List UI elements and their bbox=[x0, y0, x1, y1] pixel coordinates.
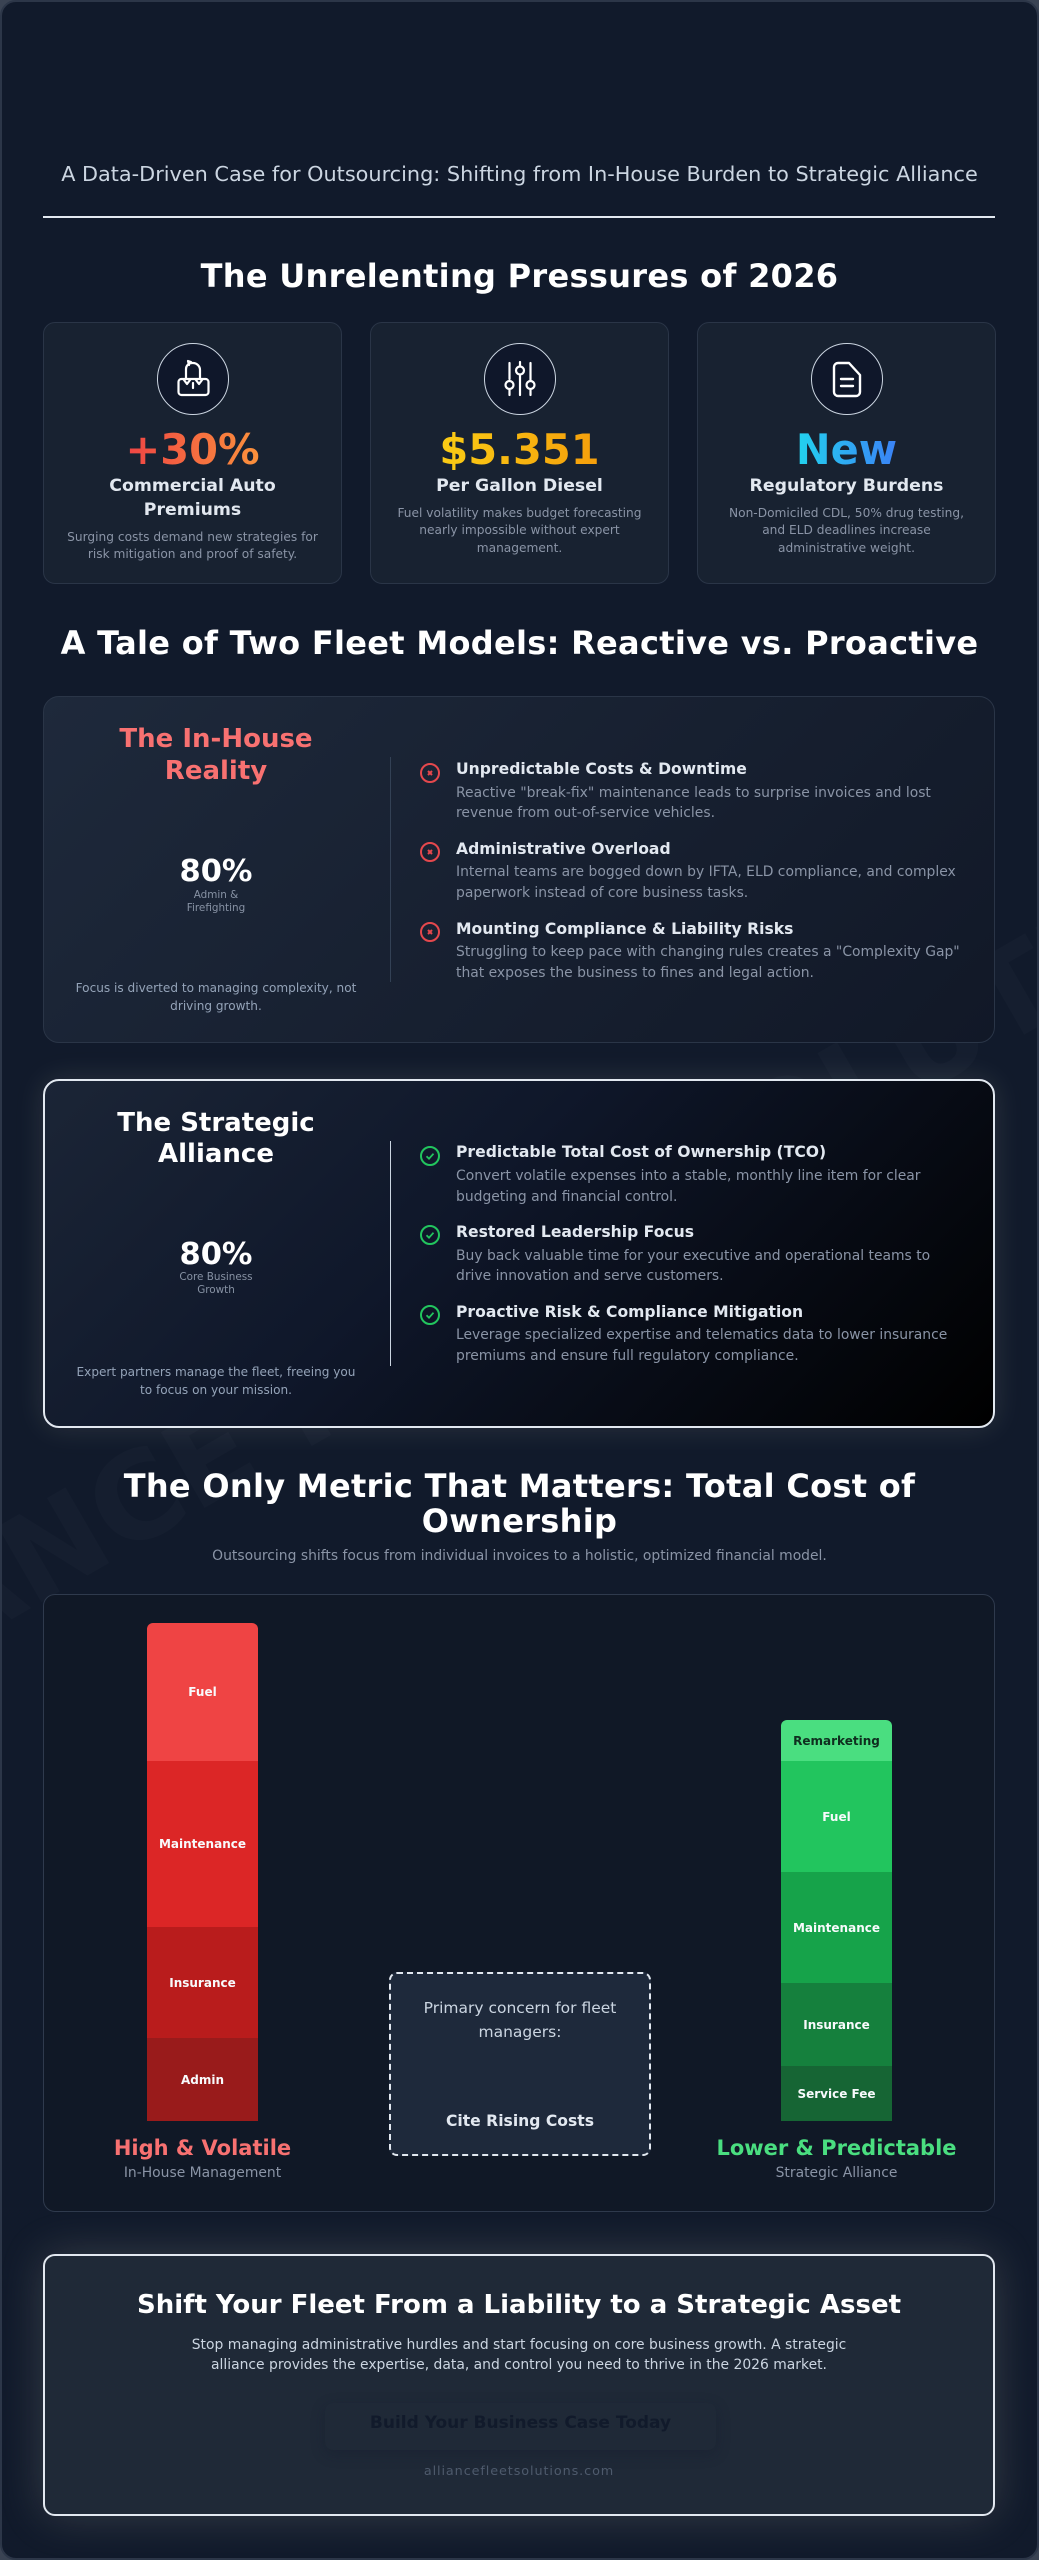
divider bbox=[390, 757, 391, 982]
heading: The Strategic bbox=[117, 1108, 315, 1138]
panel: strategic alliance bbox=[43, 1079, 995, 1428]
description: risk mitigation and proof of safety. bbox=[88, 547, 297, 561]
note: to focus on your mission. bbox=[140, 1382, 292, 1396]
callout text bbox=[424, 1998, 616, 2041]
stat caption: Admin & bbox=[194, 888, 238, 900]
icon: premium bag bbox=[157, 343, 229, 415]
callout text: managers: bbox=[479, 2023, 561, 2041]
callout emphasis: Cite Rising Costs bbox=[446, 2112, 594, 2130]
segment: fuel bbox=[147, 1623, 258, 1761]
bar caption: Strategic Alliance bbox=[776, 2165, 897, 2181]
heading: Reality bbox=[165, 756, 267, 786]
segment: fuel bbox=[781, 1761, 892, 1872]
cta text: Stop managing administrative hurdles and start focusing on core business growth. A strategic bbox=[192, 2337, 846, 2353]
segment: admin bbox=[147, 2038, 258, 2121]
label bbox=[109, 476, 276, 520]
segment: insurance: Insurance bbox=[803, 2018, 870, 2032]
segment: insurance: Insurance bbox=[169, 1976, 236, 1990]
stat caption: Core Business bbox=[179, 1270, 253, 1282]
segment: fuel: Fuel bbox=[188, 1685, 217, 1699]
website: alliancefleetsolutions.com bbox=[424, 2464, 614, 2479]
panel: in-house reality bbox=[43, 696, 995, 1043]
label: Commercial Auto bbox=[109, 476, 276, 496]
segment: service fee bbox=[781, 2066, 892, 2121]
bar label: Lower & Predictable bbox=[716, 2136, 957, 2160]
item text: drive innovation and serve customers. bbox=[456, 1268, 724, 1284]
label: Per Gallon Diesel bbox=[436, 476, 603, 496]
cta button: Build Your Business Case Today bbox=[370, 2413, 671, 2433]
item title: Administrative Overload bbox=[456, 840, 671, 858]
callout: primary concern bbox=[389, 1972, 651, 2156]
item text bbox=[456, 864, 956, 901]
segment: insurance bbox=[781, 1983, 892, 2066]
item text: Internal teams are bogged down by IFTA, ELD compliance, and complex bbox=[456, 864, 956, 880]
panel: diesel price bbox=[370, 322, 669, 584]
panel: regulatory burdens bbox=[697, 322, 996, 584]
segment: remarketing bbox=[781, 1720, 892, 1761]
icon: document bbox=[811, 343, 883, 415]
stat caption bbox=[187, 888, 245, 914]
description: Surging costs demand new strategies for bbox=[67, 530, 318, 544]
segment: admin: Admin bbox=[181, 2072, 224, 2086]
header rule bbox=[43, 216, 995, 218]
description: and ELD deadlines increase bbox=[762, 523, 931, 537]
note bbox=[76, 981, 356, 1012]
note: Focus is diverted to managing complexity, not bbox=[76, 981, 356, 995]
label: Premiums bbox=[144, 500, 241, 520]
description: management. bbox=[477, 541, 562, 555]
item text: Leverage specialized expertise and telematics data to lower insurance bbox=[456, 1327, 947, 1343]
icon: check bbox=[420, 1305, 440, 1325]
heading bbox=[117, 1108, 315, 1168]
segment: service fee: Service Fee bbox=[797, 2086, 876, 2100]
item title: Mounting Compliance & Liability Risks bbox=[456, 920, 793, 938]
stacked bar: alliance bbox=[781, 1720, 892, 2121]
item text bbox=[456, 1248, 930, 1284]
label: Regulatory Burdens bbox=[750, 476, 943, 496]
heading: Alliance bbox=[158, 1138, 274, 1168]
note bbox=[77, 1365, 355, 1396]
icon: check bbox=[420, 1225, 440, 1245]
icon: x bbox=[420, 922, 440, 942]
item text: budgeting and financial control. bbox=[456, 1189, 677, 1205]
heading: pressures: The Unrelenting Pressures of 2026 bbox=[201, 257, 838, 295]
segment: maintenance bbox=[147, 1761, 258, 1927]
icon: x bbox=[420, 763, 440, 783]
heading: The In-House bbox=[119, 724, 313, 754]
cta text: alliance provides the expertise, data, and control you need to thrive in the 2026 market. bbox=[211, 2357, 827, 2373]
description: nearly impossible without expert bbox=[419, 523, 620, 537]
segment: insurance bbox=[147, 1927, 258, 2038]
item text: Struggling to keep pace with changing rules creates a "Complexity Gap" bbox=[456, 944, 960, 960]
stat: 80%: 80% bbox=[179, 854, 252, 888]
item text: paperwork instead of core business tasks. bbox=[456, 885, 748, 901]
panel: commercial auto premiums bbox=[43, 322, 342, 584]
cta button bbox=[325, 2403, 716, 2450]
item text bbox=[456, 1168, 921, 1205]
heading: fleet models: A Tale of Two Fleet Models: Reactive vs. Proactive bbox=[61, 624, 978, 662]
stat caption bbox=[179, 1270, 253, 1296]
item title: Unpredictable Costs & Downtime bbox=[456, 760, 747, 778]
segment: maintenance: Maintenance bbox=[793, 1920, 880, 1934]
cta heading: Shift Your Fleet From a Liability to a Strategic Asset bbox=[137, 2290, 901, 2320]
item text bbox=[456, 1327, 947, 1364]
note: Expert partners manage the fleet, freeing you bbox=[77, 1365, 355, 1379]
panel: call to action bbox=[43, 2254, 995, 2516]
item text bbox=[456, 785, 931, 821]
segment: fuel: Fuel bbox=[822, 1810, 851, 1824]
item text: Reactive "break-fix" maintenance leads to surprise invoices and lost bbox=[456, 785, 931, 801]
description bbox=[397, 506, 642, 555]
stat: $5.351: $5.351 bbox=[439, 425, 600, 474]
item text: premiums and ensure full regulatory compliance. bbox=[456, 1348, 799, 1364]
panel: cost chart bbox=[43, 1594, 995, 2212]
item text: that exposes the business to fines and legal action. bbox=[456, 965, 814, 981]
heading: total cost of ownership: The Only Metric That Matters: Total Cost of bbox=[124, 1467, 915, 1505]
item text: Buy back valuable time for your executive and operational teams to bbox=[456, 1248, 930, 1264]
description: administrative weight. bbox=[778, 541, 915, 555]
heading bbox=[119, 724, 313, 786]
callout text: Primary concern for fleet bbox=[424, 1998, 616, 2016]
item title: Predictable Total Cost of Ownership (TCO) bbox=[456, 1143, 826, 1161]
stat: 80%: 80% bbox=[179, 1236, 252, 1272]
segment: remarketing: Remarketing bbox=[793, 1734, 880, 1748]
item text bbox=[456, 944, 960, 981]
icon: sliders bbox=[484, 343, 556, 415]
heading: total cost of ownership: Ownership bbox=[422, 1502, 617, 1540]
bar caption: In-House Management bbox=[124, 2165, 281, 2181]
stat: New: New bbox=[796, 425, 897, 474]
icon: x bbox=[420, 842, 440, 862]
segment: maintenance bbox=[781, 1872, 892, 1983]
description bbox=[729, 506, 964, 555]
description: Non-Domiciled CDL, 50% drug testing, bbox=[729, 506, 964, 520]
stat: +30%: +30% bbox=[125, 425, 260, 474]
segment: maintenance: Maintenance bbox=[159, 1837, 246, 1851]
item title: Restored Leadership Focus bbox=[456, 1223, 694, 1241]
note: driving growth. bbox=[170, 998, 262, 1012]
divider bbox=[390, 1140, 391, 1366]
item text: Convert volatile expenses into a stable, monthly line item for clear bbox=[456, 1168, 921, 1184]
item title: Proactive Risk & Compliance Mitigation bbox=[456, 1303, 803, 1321]
stacked bar: in-house bbox=[147, 1623, 258, 2121]
cta text bbox=[192, 2337, 846, 2373]
subtitle: A Data-Driven Case for Outsourcing: Shifting from In-House Burden to Strategic Alliance bbox=[61, 162, 978, 186]
item text: revenue from out-of-service vehicles. bbox=[456, 805, 715, 821]
heading: total cost of ownership bbox=[124, 1467, 916, 1540]
icon: check bbox=[420, 1146, 440, 1166]
section subtitle: Outsourcing shifts focus from individual invoices to a holistic, optimized financial model. bbox=[212, 1548, 827, 1564]
bar label: High & Volatile bbox=[114, 2136, 291, 2160]
stat caption: Firefighting bbox=[187, 902, 245, 914]
stat caption: Growth bbox=[197, 1284, 235, 1296]
description: Fuel volatility makes budget forecasting bbox=[397, 506, 642, 520]
description bbox=[67, 530, 318, 561]
